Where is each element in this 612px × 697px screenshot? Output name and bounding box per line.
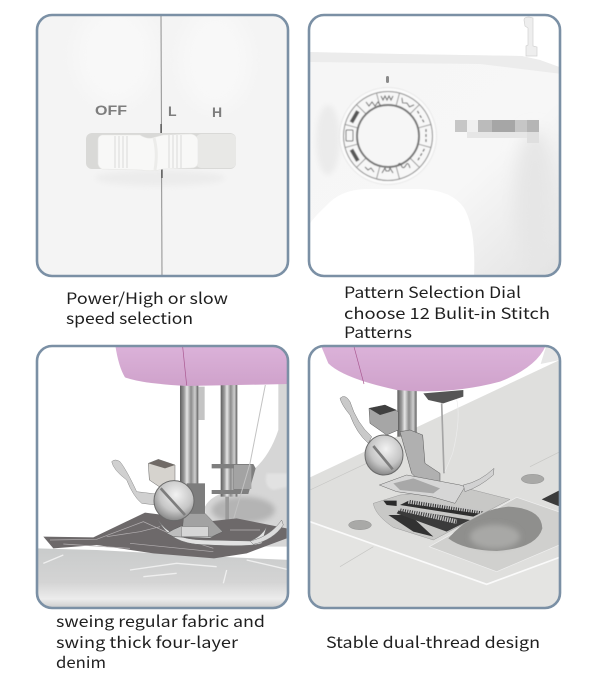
- needle bars: [198, 387, 205, 420]
- caption: pattern dial: choose 12 Bulit-in Stitch: [344, 302, 550, 324]
- pink head: [116, 347, 287, 386]
- label: OFF L H: H: [212, 104, 222, 120]
- blurred brand logo: [455, 120, 539, 143]
- caption: dual thread: Stable dual-thread design: [326, 631, 540, 653]
- panel: dual-thread design: [308, 343, 563, 613]
- needle plate: [373, 488, 510, 540]
- label: OFF L H: L: [168, 103, 177, 119]
- thumb screw: [154, 481, 194, 521]
- bobbin cover plate: [429, 497, 563, 572]
- table: [37, 548, 290, 610]
- thread spindle: [524, 17, 537, 56]
- panel: sewing thick denim: [36, 343, 290, 610]
- fabric: [43, 513, 287, 558]
- presser foot: [340, 396, 494, 503]
- presser foot: [112, 459, 283, 546]
- panel: power and speed switch: [36, 5, 290, 278]
- label: OFF L H: OFF: [95, 102, 128, 118]
- caption: thick fabric: sweing regular fabric and: [56, 610, 265, 632]
- machine table: [310, 360, 559, 584]
- label: OFF L H: [96, 106, 222, 117]
- icon: speed slider switch: [86, 133, 236, 171]
- caption: pattern dial: [344, 281, 550, 343]
- caption: pattern dial: Patterns: [344, 321, 412, 343]
- caption: power selection: speed selection: [66, 307, 193, 329]
- caption: thick fabric: [56, 610, 265, 673]
- machine column: [205, 383, 288, 547]
- caption: thick fabric: denim: [56, 651, 106, 673]
- pink head: [320, 343, 547, 391]
- needle bar: [397, 387, 417, 437]
- thread: [234, 385, 266, 518]
- caption: thick fabric: swing thick four-layer: [56, 631, 239, 653]
- caption: power selection: [66, 287, 229, 329]
- screws: [349, 520, 371, 530]
- dial mark: [386, 76, 389, 83]
- thumb screw: [365, 435, 403, 475]
- machine body: [308, 52, 562, 278]
- caption: pattern dial: Pattern Selection Dial: [344, 281, 521, 303]
- needle and thread: [442, 403, 444, 473]
- clamp: [212, 464, 256, 494]
- panel: pattern selection dial: [308, 14, 562, 278]
- caption: power selection: Power/High or slow: [66, 287, 229, 309]
- icon: stitch pattern dial: [340, 88, 436, 184]
